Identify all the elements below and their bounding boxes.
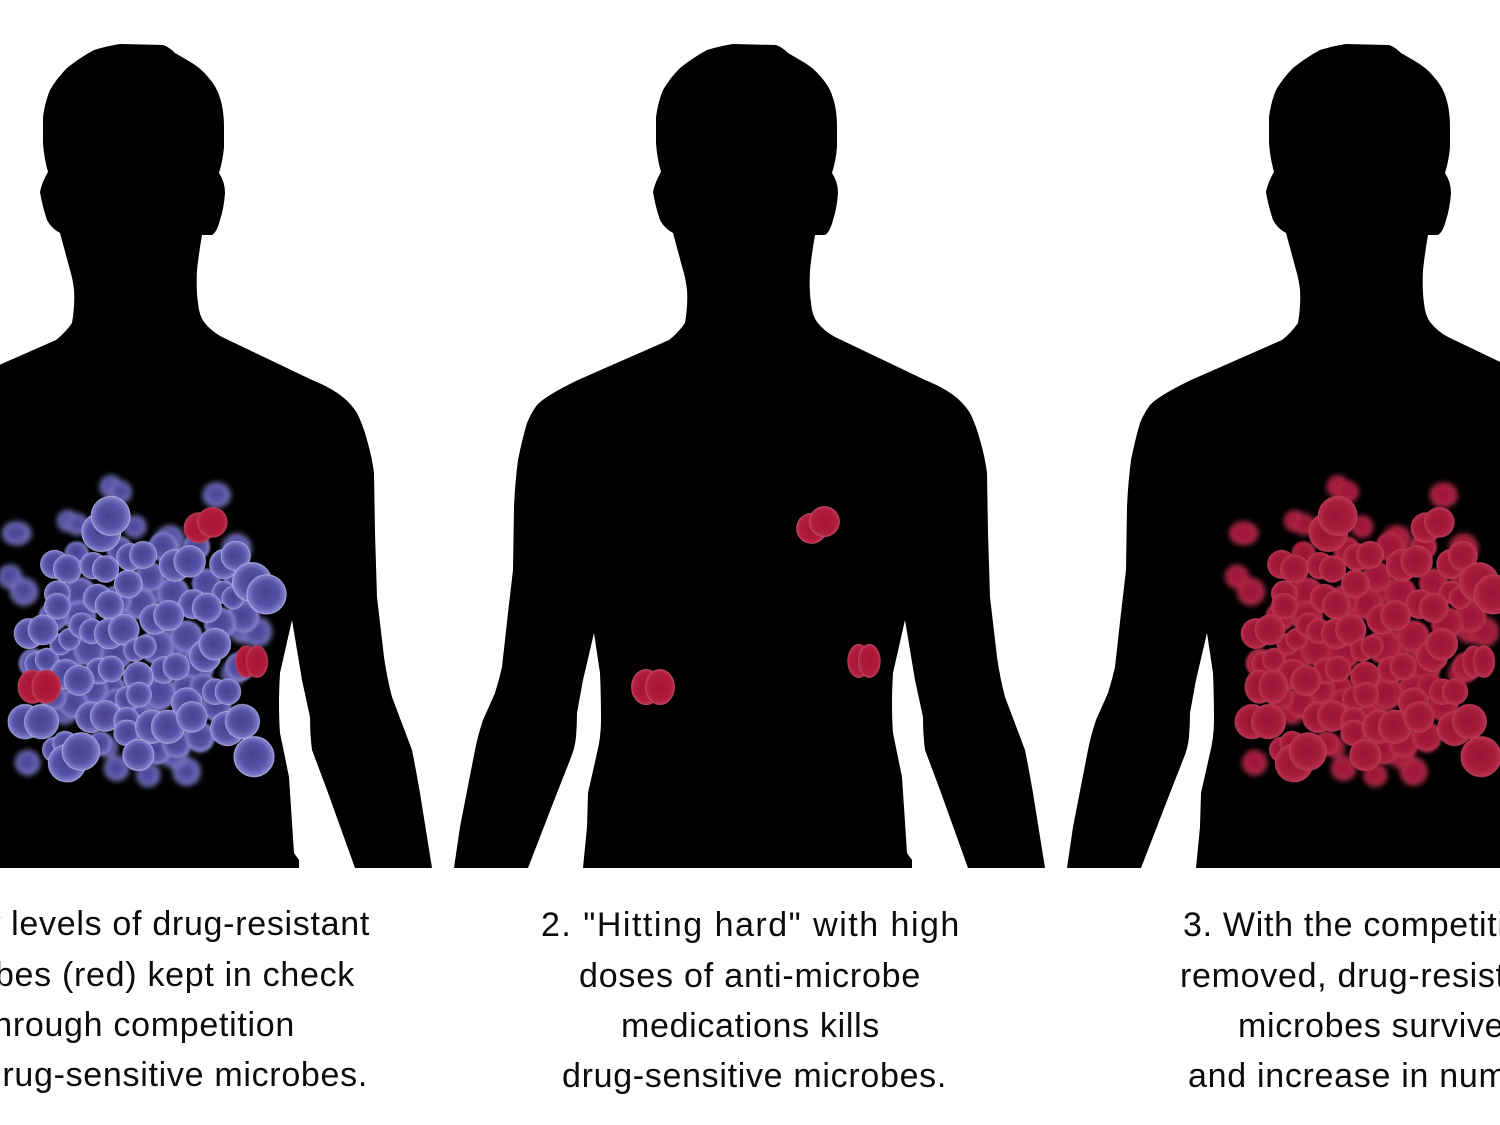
caption: step 3 xyxy=(1180,906,1500,1095)
caption: step 1 xyxy=(0,905,370,1094)
silhouette: person 1 xyxy=(0,44,432,868)
panel: figure 2, only resistant microbes survive treatment xyxy=(454,44,1045,868)
panel: figure 1, balanced microbes xyxy=(0,44,432,868)
microbe cluster: all red xyxy=(1225,471,1500,790)
caption: step 2: medications kills xyxy=(621,1007,880,1045)
silhouette: person 2 xyxy=(454,44,1045,868)
silhouette: person 3 xyxy=(1067,44,1500,868)
red resistant microbes xyxy=(18,503,268,703)
microbe cluster: drug-sensitive purple with red resistant xyxy=(0,471,294,790)
red resistant microbes xyxy=(1245,503,1495,703)
red resistant microbes xyxy=(632,501,880,704)
caption: step 2: 2. "Hitting hard" with high xyxy=(541,906,960,944)
panel: figure 3, resistant microbes multiply xyxy=(1067,44,1500,868)
caption: step 2: doses of anti-microbe xyxy=(579,957,921,995)
caption: step 3: microbes survive xyxy=(1238,1007,1500,1045)
caption: step 2 xyxy=(541,906,960,1095)
caption: step 2: drug-sensitive microbes. xyxy=(562,1057,947,1095)
